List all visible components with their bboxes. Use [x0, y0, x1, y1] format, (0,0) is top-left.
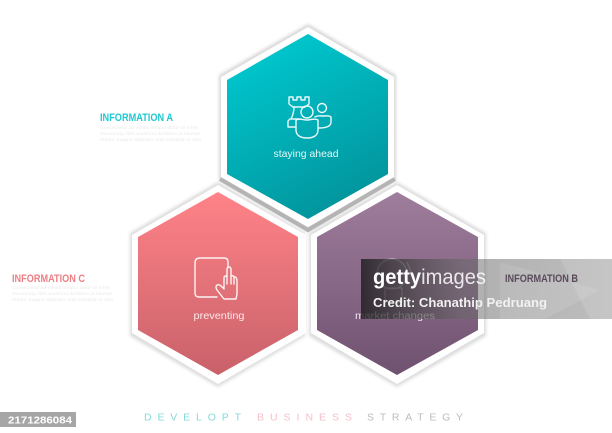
text block: information C: dolore magna aliquam erat volutpat ut wisi	[12, 297, 113, 302]
panel: teal hexagon frame	[219, 24, 396, 232]
footer title: STRATEGY	[367, 412, 463, 424]
footer title: BUSINESS	[257, 412, 352, 424]
panel: teal hexagon	[227, 34, 388, 219]
footer title	[144, 412, 463, 424]
text block: information C: Consectetur ad minim tempor dolor sit amet	[12, 285, 111, 290]
image id badge: 2171286084	[8, 414, 72, 426]
text block: information A	[100, 112, 201, 142]
label: staying ahead: staying ahead	[274, 148, 339, 160]
text block: information A: Consectetur ad minim tempor dolor sit amet	[100, 125, 199, 130]
text block: information C: Nonummy nibh euismod tincidunt ut laoreet	[12, 291, 113, 296]
text block: information C	[12, 273, 113, 302]
watermark: credit: Credit: Chanathip Pedruang	[373, 295, 547, 310]
text block: information A: INFORMATION A	[100, 112, 173, 124]
text block: information C: INFORMATION C	[12, 273, 85, 285]
icon: chess rook and people	[288, 97, 331, 138]
icon: hand on document	[195, 258, 237, 299]
footer title: DEVELOPT	[144, 412, 242, 424]
image id badge	[0, 412, 76, 427]
text block: information A: Nonummy nibh euismod tincidunt ut laoreet	[100, 131, 201, 136]
label: preventing: preventing	[194, 310, 245, 322]
icon: market change bulb	[377, 259, 412, 302]
panel: plum hexagon frame	[309, 182, 486, 387]
label: market changes: market changes	[355, 310, 435, 322]
panel: pink hexagon frame	[130, 182, 306, 387]
panel: pink hexagon	[138, 192, 298, 375]
text block: information B: INFORMATION B	[505, 273, 578, 285]
watermark band	[361, 259, 612, 319]
panel: plum hexagon	[317, 192, 478, 375]
watermark: gettyimages: gettyimages	[373, 266, 486, 289]
text block: information A: dolore magna aliquam erat volutpat ut wisi	[100, 137, 201, 142]
